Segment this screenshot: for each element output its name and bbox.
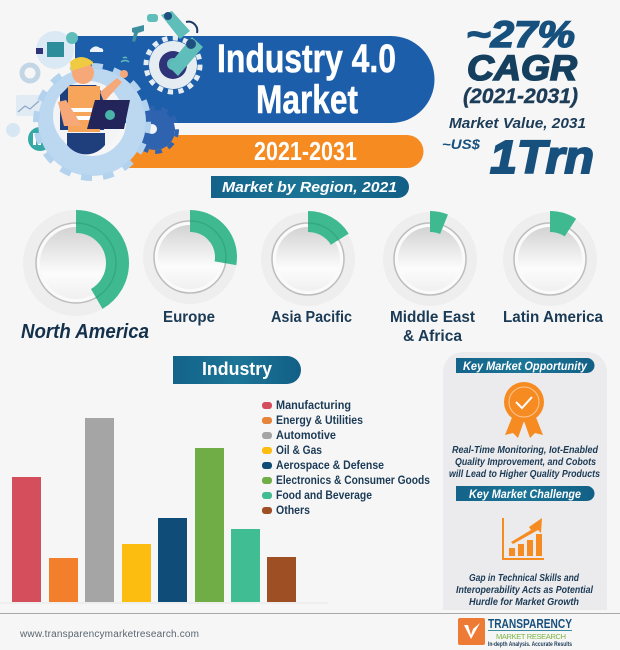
donut: Europe: Europe <box>163 309 215 326</box>
chart legend: Manufacturing <box>276 400 351 412</box>
title text: Market <box>256 78 358 122</box>
section heading: industry: Industry <box>202 359 272 379</box>
donut: Latin America: Latin America <box>503 309 603 326</box>
period banner <box>125 135 424 168</box>
icon: growth chart <box>502 518 544 560</box>
logo: In-depth Analysis. Accurate Results <box>488 642 573 648</box>
chart legend: Others <box>276 505 310 517</box>
opportunity text <box>449 445 600 480</box>
illustration: dark gear <box>133 108 177 152</box>
stat: CAGR: (2021-2031) <box>463 85 578 108</box>
donut: North America: North America <box>21 321 149 343</box>
opportunity text: Real-Time Monitoring, Iot-Enabled <box>452 445 599 456</box>
illustration: left icons <box>6 31 78 151</box>
chart legend: Oil & Gas <box>276 445 322 457</box>
footer rule <box>0 613 620 614</box>
opportunity text: will Lead to Higher Quality Products <box>449 469 600 480</box>
donut: Latin America <box>503 212 603 326</box>
challenge text: Gap in Technical Skills and <box>469 573 580 584</box>
stat: market value: 1Trn <box>490 131 594 183</box>
footer url: www.transparencymarketresearch.com <box>19 629 199 640</box>
chart legend: Automotive <box>276 430 336 442</box>
illustration: large gear with worker <box>36 46 148 178</box>
bar chart <box>0 418 328 604</box>
illustration: robot arm gear <box>132 11 203 92</box>
opportunity text: Quality Improvement, and Cobots <box>455 457 596 468</box>
worker <box>58 57 130 154</box>
chart legend: Food and Beverage <box>276 490 372 502</box>
title banner <box>75 36 434 123</box>
donut: Asia Pacific <box>261 212 355 326</box>
stat: CAGR: ~27% <box>466 14 575 55</box>
chart legend: Electronics & Consumer Goods <box>276 475 430 487</box>
chart legend <box>262 400 430 517</box>
opportunity heading: Key Market Opportunity <box>463 359 588 373</box>
logo: MARKET RESEARCH <box>496 632 566 641</box>
stat: market value: ~US$ <box>442 136 480 152</box>
period banner: 2021-2031 <box>254 136 357 166</box>
logo: TRANSPARENCY <box>488 616 572 631</box>
icon: medal <box>504 382 544 438</box>
donut: Middle East and Africa <box>383 212 477 345</box>
stat: market value <box>442 115 594 183</box>
chart legend: Aerospace & Defense <box>276 460 384 472</box>
panel: market opportunity and challenge <box>443 352 607 610</box>
section heading: market by region: Market by Region, 2021 <box>222 179 397 196</box>
donut: Asia Pacific: Asia Pacific <box>271 309 352 326</box>
title text: Industry 4.0 <box>217 37 396 81</box>
donut: Middle East and Africa: Middle East <box>390 309 476 326</box>
title text <box>217 37 396 122</box>
stat: CAGR: CAGR <box>467 49 578 88</box>
challenge text: Hurdle for Market Growth <box>469 597 579 608</box>
stat: CAGR <box>463 14 578 108</box>
logo <box>458 616 573 648</box>
donut: North America <box>21 210 149 343</box>
challenge text <box>456 573 593 608</box>
section heading: industry <box>173 356 301 384</box>
stat: market value: Market Value, 2031 <box>449 115 586 132</box>
challenge text: Interoperability Acts as Potential <box>456 585 593 596</box>
challenge heading: Key Market Challenge <box>469 487 581 501</box>
donut: Europe <box>143 210 237 326</box>
section heading: market by region <box>211 176 409 198</box>
donut: Middle East and Africa: & Africa <box>403 328 462 345</box>
chart legend: Energy & Utilities <box>276 415 363 427</box>
